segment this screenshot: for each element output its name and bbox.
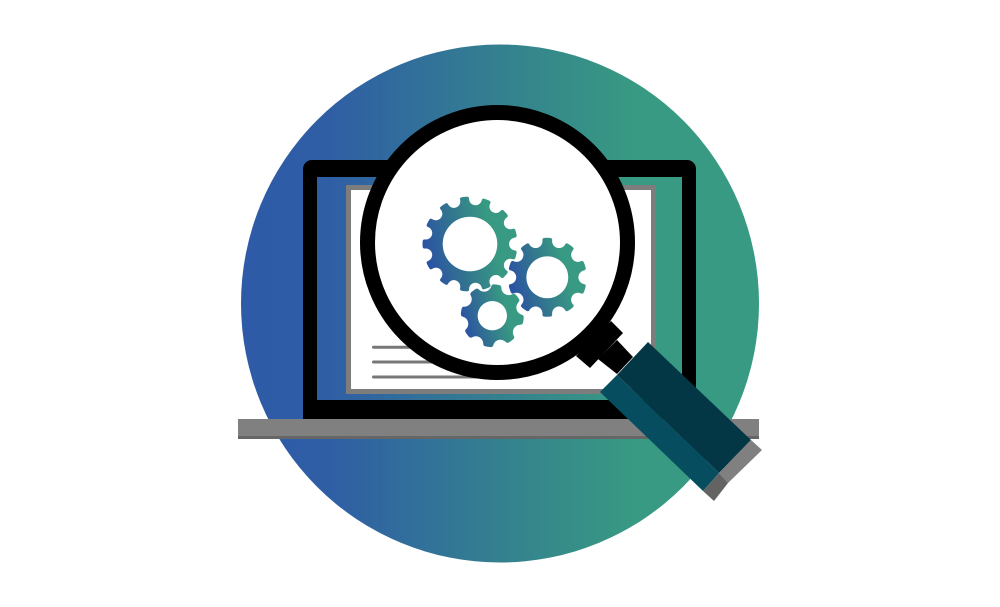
handle cap light (719, 440, 762, 483)
laptop bezel (303, 160, 696, 419)
large gear (422, 196, 517, 292)
small gear (460, 284, 524, 348)
magnifier collar (576, 321, 623, 368)
magnifier shaft (598, 340, 633, 374)
background gradient circle (241, 44, 759, 562)
text lines on screen (374, 347, 480, 377)
handle light side (600, 375, 719, 491)
laptop (238, 160, 759, 439)
handle cap dark (703, 473, 728, 501)
medium gear (508, 238, 586, 317)
laptop screen window (346, 185, 656, 394)
laptop base (238, 419, 759, 439)
magnifying glass (368, 112, 762, 501)
gears (420, 194, 590, 350)
magnifier ring (368, 112, 628, 372)
magnifying glass lens (374, 120, 620, 366)
handle dark side (617, 342, 751, 473)
